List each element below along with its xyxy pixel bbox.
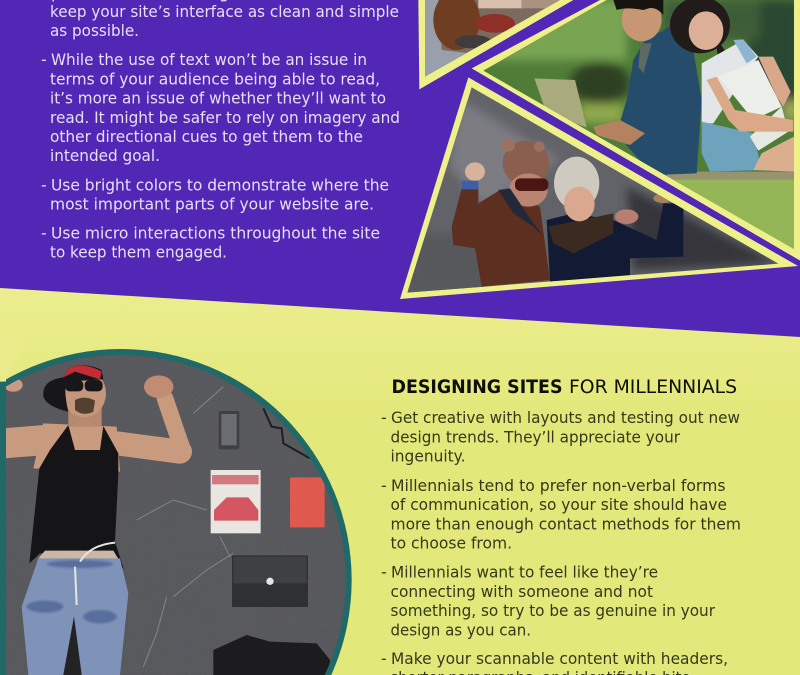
text block: millennials bullet list: to choose from. <box>390 534 512 553</box>
photo: couple with laptop on grass, yellow frame <box>472 0 800 260</box>
black bag <box>213 635 330 675</box>
text block: purple section bullet list: other directional cues to get them to the <box>50 127 363 146</box>
text block: millennials bullet list: something, so try to be as genuine in your <box>390 601 715 620</box>
waist <box>38 550 118 558</box>
text block: millennials bullet list: Get creative with layouts and testing out new <box>391 408 740 427</box>
laptop <box>232 555 308 607</box>
man: arms and shoulders <box>3 398 183 452</box>
text block: millennials bullet list: connecting with someone and not <box>390 582 653 601</box>
photo: top-left triangle with yellow frame <box>418 0 574 90</box>
text block: millennials bullet list: - <box>381 649 387 668</box>
purple stripe between photos <box>468 70 800 269</box>
text block: purple section bullet list: read. It might be safer to rely on imagery and <box>50 108 400 127</box>
photo: two friends in winter hats, yellow frame <box>400 77 798 299</box>
text block: purple section bullet list: terms of your audience being able to read, <box>50 70 380 89</box>
photo collage: three triangular photos <box>400 0 800 300</box>
text block: millennials bullet list: Millennials want to feel like they’re <box>391 563 658 582</box>
acid wash jeans <box>22 558 128 675</box>
text block: millennials bullet list: design trends. They’ll appreciate your <box>390 428 680 447</box>
head with cap and sunglasses <box>68 407 102 427</box>
text block: purple section bullet list: - <box>41 224 47 243</box>
woman in navy jacket <box>547 203 683 282</box>
text block: purple section bullet list: Use bright colors to demonstrate where the <box>51 176 389 195</box>
text block: purple section bullet list: it’s more an issue of whether they’ll want to <box>50 89 386 108</box>
man in denim jacket <box>617 27 702 175</box>
asphalt cracks <box>137 387 233 667</box>
text block: millennials bullet list: more than enough contact methods for them <box>390 515 741 534</box>
laptop <box>534 78 587 127</box>
text block: millennials bullet list: ingenuity. <box>390 447 466 466</box>
phone <box>219 411 239 449</box>
magazine <box>211 470 261 533</box>
text block: millennials bullet list: Make your scannable content with headers, <box>391 649 728 668</box>
text block: purple section bullet list: most important parts of your website are. <box>50 195 374 214</box>
text block: millennials bullet list <box>381 408 741 675</box>
text block: purple section bullet list: to keep them engaged. <box>50 243 227 262</box>
red notebook <box>290 477 325 527</box>
text block: purple section bullet list: While the use of text won’t be an issue in <box>51 50 367 69</box>
text block: purple section bullet list <box>41 0 400 262</box>
text block: purple section bullet list: Use micro interactions throughout the site <box>51 224 380 243</box>
text block: purple section bullet list: keep your site’s interface as clean and simple <box>50 2 399 21</box>
heading: designing sites for millennials: DESIGNING SITES <box>392 377 562 398</box>
text block: purple section bullet list: intended goal. <box>50 146 160 165</box>
text block: millennials bullet list: Millennials tend to prefer non-verbal forms <box>391 476 726 495</box>
text block: purple section bullet list: - <box>41 50 47 69</box>
woman in brown coat <box>452 188 550 287</box>
text block: purple section bullet list: - <box>41 176 47 195</box>
text block: purple section bullet list: as possible. <box>50 21 139 40</box>
heading: designing sites for millennials <box>392 377 737 398</box>
panel: designing sites for millennials <box>381 377 741 675</box>
text block: millennials bullet list: - <box>381 408 387 427</box>
text block: millennials bullet list: of communication, so your site should have <box>390 495 727 514</box>
cable <box>263 408 310 458</box>
woman with white top and folder <box>670 0 730 53</box>
text block: millennials bullet list: design as you can. <box>390 621 531 640</box>
panel: purple top section <box>0 0 800 337</box>
text block: millennials bullet list: - <box>381 476 387 495</box>
black tank top <box>29 425 124 570</box>
text block: millennials bullet list: - <box>381 563 387 582</box>
heading: designing sites for millennials: FOR MILLENNIALS <box>569 377 737 398</box>
panel: circular photo of man on asphalt <box>0 338 370 675</box>
